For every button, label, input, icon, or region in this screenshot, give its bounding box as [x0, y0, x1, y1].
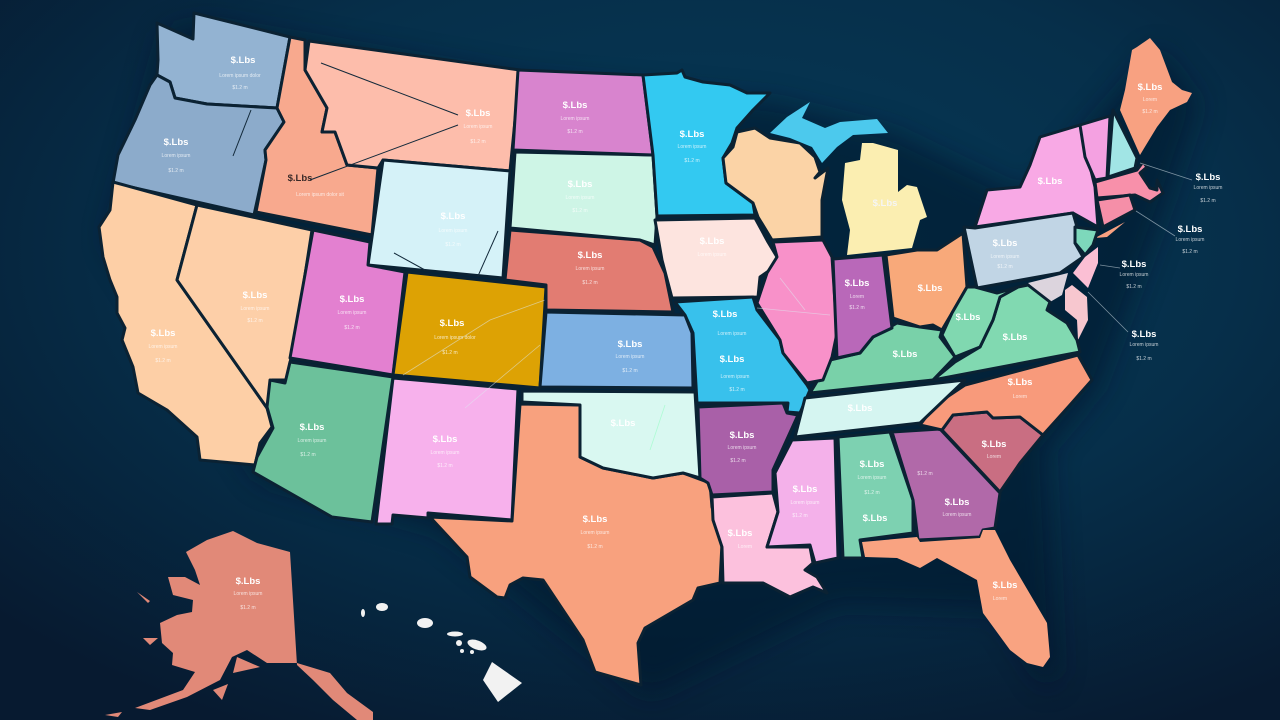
state: North Dakota: [513, 70, 653, 155]
state: Wisconsin: [723, 128, 828, 240]
state: Arizona: Lorem ipsum: [298, 438, 326, 444]
state: Delaware area: [1073, 247, 1098, 288]
state: Nebraska: $.Lbs: [578, 250, 602, 261]
state: Maine: [1120, 38, 1192, 155]
state: Texas: $1.2 m: [587, 544, 603, 550]
state: South Carolina: [942, 412, 1043, 492]
state: Georgia: $.Lbs: [945, 497, 969, 508]
callout: northeast label 4: $.Lbs: [1132, 329, 1156, 340]
callout: northeast label 2: $.Lbs: [1178, 224, 1202, 235]
state: New Mexico: Lorem ipsum: [431, 450, 459, 456]
state: New York: [975, 125, 1098, 227]
state: Utah: $.Lbs: [340, 294, 364, 305]
state: Oregon: Lorem ipsum: [162, 153, 190, 159]
state: Pennsylvania: [964, 213, 1083, 288]
state: Iowa: $.Lbs: [700, 236, 724, 247]
state: Wyoming: $1.2 m: [445, 242, 461, 248]
state: Delmarva peninsula: [1065, 285, 1088, 340]
state: South Dakota: $.Lbs: [568, 179, 592, 190]
state: Arizona: $.Lbs: [300, 422, 324, 433]
state: Montana: $1.2 m: [470, 139, 486, 145]
state: Nebraska: [505, 230, 673, 312]
state: Colorado: Lorem ipsum dolor: [434, 335, 476, 341]
callout: northeast label 3: $.Lbs: [1122, 259, 1146, 270]
state: Oregon: $.Lbs: [164, 137, 188, 148]
state: Arizona: [253, 362, 393, 522]
state: Ohio: $.Lbs: [918, 283, 942, 294]
state: Alaska: $1.2 m: [240, 605, 256, 611]
state: Louisiana: Lorem: [738, 544, 752, 550]
state: Wyoming: $.Lbs: [441, 211, 465, 222]
state: Minnesota: Lorem ipsum: [678, 144, 706, 150]
state: Washington: $1.2 m: [232, 85, 248, 91]
state: South Carolina: Lorem: [987, 454, 1001, 460]
state: Michigan lower peninsula: $.Lbs: [873, 198, 897, 209]
state: Washington: [157, 13, 290, 108]
state: Nebraska: Lorem ipsum: [576, 266, 604, 272]
state: Kentucky: [810, 323, 955, 393]
state: Tennessee: $.Lbs: [848, 403, 872, 414]
state: North Dakota: Lorem ipsum: [561, 116, 589, 122]
state: Arkansas: Lorem ipsum: [728, 445, 756, 451]
state: Louisiana: [712, 493, 827, 597]
state: Florida: [862, 530, 1050, 667]
state: Michigan lower peninsula: [842, 143, 927, 255]
state: Oklahoma: [522, 391, 700, 478]
state: North Dakota: $1.2 m: [567, 129, 583, 135]
state: Alabama: $1.2 m: [864, 490, 880, 496]
state: Virginia: $.Lbs: [1003, 332, 1027, 343]
callout: northeast label 1: $.Lbs: [1196, 172, 1220, 183]
state: California: $.Lbs: [151, 328, 175, 339]
state: Massachusetts: [1095, 162, 1163, 202]
state: Nevada: $1.2 m: [247, 318, 263, 324]
state: Arkansas: $.Lbs: [730, 430, 754, 441]
state: Pennsylvania: $1.2 m: [997, 264, 1013, 270]
state: Missouri: $1.2 m: [729, 387, 745, 393]
state: Mississippi: Lorem ipsum: [791, 500, 819, 506]
state: Oregon: $1.2 m: [168, 168, 184, 174]
state: California: Lorem ipsum: [149, 344, 177, 350]
state: Maine: $1.2 m: [1142, 109, 1158, 115]
state: Louisiana: $.Lbs: [728, 528, 752, 539]
state: Arizona: $1.2 m: [300, 452, 316, 458]
state: Oregon: [113, 75, 284, 215]
state: West Virginia: $.Lbs: [956, 312, 980, 323]
state: Georgia: $1.2 m: [917, 471, 933, 477]
state: Nevada: $.Lbs: [243, 290, 267, 301]
state: Wyoming: [368, 160, 510, 278]
state: New Mexico: [376, 345, 540, 524]
state: Wyoming: Lorem ipsum: [439, 228, 467, 234]
state: Long Island: [1095, 222, 1125, 238]
state: Idaho: Lorem ipsum dolor sit: [296, 192, 345, 198]
state: Florida: Lorem: [993, 596, 1007, 602]
state: Kansas: Lorem ipsum: [616, 354, 644, 360]
callout: northeast label 3: $1.2 m: [1126, 284, 1142, 290]
callout: northeast label 4: $1.2 m: [1136, 356, 1152, 362]
state: Missouri: Lorem ipsum: [721, 374, 749, 380]
state: Nevada: [177, 205, 312, 408]
state: Missouri: $.Lbs: [713, 309, 737, 320]
state: Montana: [305, 41, 520, 180]
state: Florida: $.Lbs: [993, 580, 1017, 591]
callout: northeast label 4: [1088, 292, 1158, 362]
state: Indiana: [833, 255, 892, 358]
callout: northeast label 2: [1136, 211, 1204, 255]
state: Hawaii islands: [361, 603, 522, 702]
state: Missouri: Lorem ipsum: [718, 331, 746, 337]
state: Colorado: $1.2 m: [442, 350, 458, 356]
state: Mississippi: [767, 438, 838, 563]
callout: northeast label 2: Lorem ipsum: [1176, 237, 1204, 243]
state: North Dakota: $.Lbs: [563, 100, 587, 111]
state: New York: $.Lbs: [1038, 176, 1062, 187]
state: North Carolina: Lorem: [1013, 394, 1027, 400]
state: South Dakota: Lorem ipsum: [566, 195, 594, 201]
callout: northeast label 1: [1140, 163, 1222, 204]
state: New Hampshire: [1108, 110, 1137, 177]
state: Kansas: [540, 312, 693, 388]
state: Utah: [290, 230, 405, 375]
state: Colorado: $.Lbs: [440, 318, 464, 329]
state: Alaska: [105, 531, 373, 720]
state: Nebraska: $1.2 m: [582, 280, 598, 286]
state: California: $1.2 m: [155, 358, 171, 364]
state: Iowa: Lorem ipsum: [698, 252, 726, 258]
callout: northeast label 3: [1100, 259, 1148, 290]
state: Texas: Lorem ipsum: [581, 530, 609, 536]
state: Colorado: [393, 272, 546, 388]
state: Pennsylvania: Lorem ipsum: [991, 254, 1019, 260]
state: Montana: Lorem ipsum: [464, 124, 492, 130]
state: Alaska: Lorem ipsum: [234, 591, 262, 597]
callout: northeast label 4: Lorem ipsum: [1130, 342, 1158, 348]
state: Kansas: $1.2 m: [622, 368, 638, 374]
callout: northeast label 3: Lorem ipsum: [1120, 272, 1148, 278]
state: Idaho: [256, 37, 378, 235]
state: Maine: Lorem: [1143, 97, 1157, 103]
state: Michigan upper peninsula: [770, 102, 888, 163]
state: Virginia: [933, 285, 1080, 380]
state: Arkansas: $1.2 m: [730, 458, 746, 464]
state: Indiana: $1.2 m: [849, 305, 865, 311]
state: Nevada: Lorem ipsum: [241, 306, 269, 312]
state: Washington: $.Lbs: [231, 55, 255, 66]
callout: northeast label 1: $1.2 m: [1200, 198, 1216, 204]
state: Washington: Lorem ipsum dolor: [219, 73, 261, 79]
state: Tennessee: [795, 380, 965, 437]
map shadow: [108, 23, 1200, 698]
state: Illinois: [757, 240, 837, 383]
state: Alabama: [838, 432, 913, 558]
state: Alabama: Lorem ipsum: [858, 475, 886, 481]
state: Arkansas: [698, 403, 798, 495]
state: Kentucky: $.Lbs: [893, 349, 917, 360]
state: Maine: $.Lbs: [1138, 82, 1162, 93]
state: Alaska: $.Lbs: [236, 576, 260, 587]
state: Georgia: [892, 429, 1000, 540]
state: Utah: Lorem ipsum: [338, 310, 366, 316]
state: Missouri: [675, 297, 810, 413]
state: Montana: $.Lbs: [466, 108, 490, 119]
state: Kansas: $.Lbs: [618, 339, 642, 350]
state: West Virginia: [942, 287, 1018, 357]
state: Missouri: $.Lbs: [720, 354, 744, 365]
state: Oklahoma: $.Lbs: [611, 418, 635, 429]
state: Pennsylvania: $.Lbs: [993, 238, 1017, 249]
state: North Carolina: [920, 355, 1092, 435]
state: Utah: $1.2 m: [344, 325, 360, 331]
state: New Jersey: [1075, 227, 1098, 255]
state: Mississippi: $1.2 m: [792, 513, 808, 519]
state: South Dakota: [510, 152, 657, 245]
state: Minnesota: [643, 70, 770, 216]
state: Alabama: $.Lbs: [860, 459, 884, 470]
state: Georgia: Lorem ipsum: [943, 512, 971, 518]
state: California: [99, 182, 272, 465]
state: Indiana: Lorem: [850, 294, 864, 300]
state: Vermont: [1080, 116, 1110, 180]
callout: northeast label 2: $1.2 m: [1182, 249, 1198, 255]
state: Alabama: $.Lbs: [863, 513, 887, 524]
state: North Carolina: $.Lbs: [1008, 377, 1032, 388]
state: Ohio: [886, 233, 967, 330]
state: New Mexico: $1.2 m: [437, 463, 453, 469]
state: Texas: $.Lbs: [583, 514, 607, 525]
state: Mississippi: $.Lbs: [793, 484, 817, 495]
state: South Carolina: $.Lbs: [982, 439, 1006, 450]
state: Indiana: $.Lbs: [845, 278, 869, 289]
state: Connecticut and Rhode Island: [1097, 195, 1135, 227]
state: Iowa: [655, 218, 777, 298]
state: Idaho: $.Lbs: [288, 173, 312, 184]
state: Minnesota: $1.2 m: [684, 158, 700, 164]
state: Minnesota: $.Lbs: [680, 129, 704, 140]
state: South Dakota: $1.2 m: [572, 208, 588, 214]
callout: northeast label 1: Lorem ipsum: [1194, 185, 1222, 191]
state: Maryland: [1028, 273, 1068, 302]
state: New Mexico: $.Lbs: [433, 434, 457, 445]
state: Texas: [430, 404, 722, 685]
